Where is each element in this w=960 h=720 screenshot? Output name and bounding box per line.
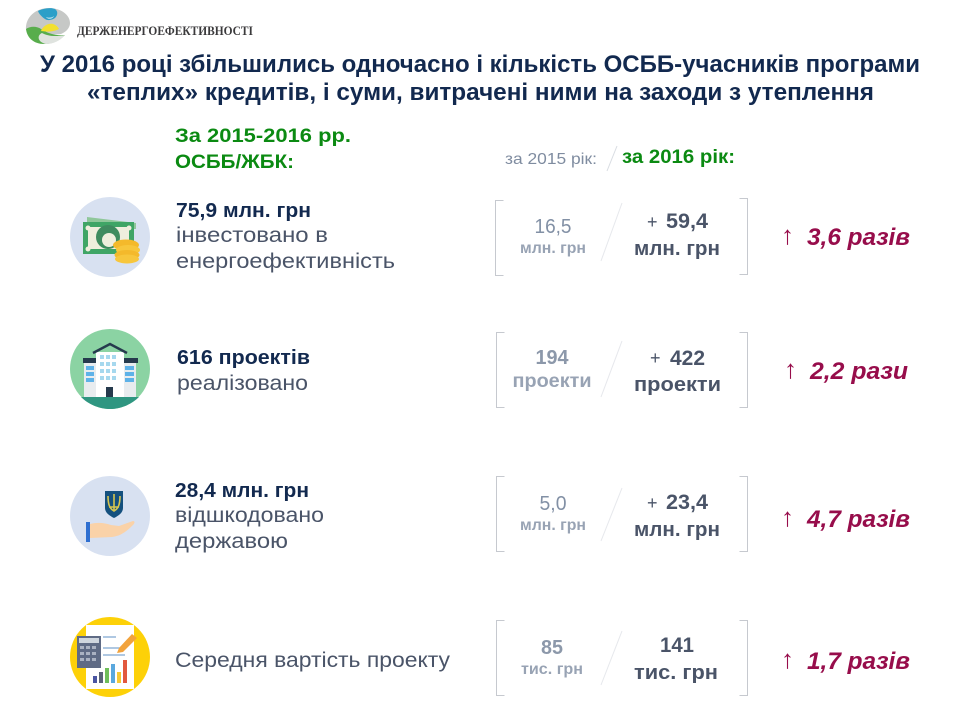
bracket box 2: +	[650, 348, 661, 368]
logo: ДЕРЖЕНЕРГОЕФЕКТИВНОСТІ	[77, 23, 253, 38]
bracket box 2	[496, 332, 748, 408]
icon: calculator and chart	[70, 617, 150, 697]
bracket box 3	[496, 476, 748, 552]
text: invested: 75,9 млн. грн	[176, 199, 311, 222]
growth: 3.6 times: 3,6 разів	[807, 224, 910, 251]
bracket box 2: 422	[670, 347, 705, 370]
bracket box 4: тис. грн	[521, 661, 583, 678]
text: projects	[177, 346, 310, 395]
text: projects: 616 проектів	[177, 346, 310, 369]
icon: money and coins	[70, 197, 150, 277]
text: invested	[176, 199, 395, 273]
bracket box 1: 16,5	[534, 216, 572, 238]
bracket box 3: +	[647, 493, 658, 513]
bracket box 4: тис. грн	[634, 661, 718, 684]
growth: 2.2 times	[784, 355, 908, 385]
bracket box 3: млн. грн	[520, 517, 586, 534]
bracket box 3: млн. грн	[634, 518, 720, 541]
title: «теплих» кредитів, і суми, витрачені ними на заходи з утеплення	[87, 79, 874, 106]
icon: building	[70, 329, 150, 409]
title	[40, 51, 920, 106]
text: reimbursed: відшкодовано	[175, 504, 324, 527]
text: invested: інвестовано в	[176, 224, 328, 247]
text: average project cost: Середня вартість проекту	[175, 649, 451, 672]
text: projects: реалізовано	[177, 372, 308, 395]
text: reimbursed: 28,4 млн. грн	[175, 479, 309, 502]
bracket box 1	[496, 198, 748, 276]
bracket box 1: млн. грн	[520, 240, 586, 257]
text: reimbursed	[175, 479, 324, 553]
logo	[26, 8, 253, 44]
bracket box 2: проекти	[512, 371, 592, 392]
icon: trident and hand	[70, 476, 150, 556]
bracket box 4	[496, 620, 748, 696]
growth: 4.7 times: 4,7 разів	[806, 506, 910, 533]
growth: 4.7 times: ↑	[781, 503, 794, 532]
subheading: period and housing associations	[175, 125, 351, 173]
bracket box 4: 141	[660, 634, 694, 657]
column header: 2015: за 2015 рік:	[505, 151, 597, 168]
growth: 2.2 times: 2,2 рази	[809, 358, 908, 385]
text: invested: енергоефективність	[176, 250, 395, 273]
subheading: period and housing associations: За 2015-2016 рр.	[175, 125, 351, 147]
bracket box 2: проекти	[634, 373, 721, 396]
text: reimbursed: державою	[175, 530, 288, 553]
growth: 2.2 times: ↑	[784, 355, 797, 384]
bracket box 3: 23,4	[666, 491, 708, 514]
subheading: period and housing associations: ОСББ/ЖБК:	[175, 151, 294, 173]
title: У 2016 році збільшились одночасно і кількість ОСББ-учасників програми	[40, 51, 920, 78]
column header: 2016: за 2016 рік:	[622, 147, 735, 168]
bracket box 1: млн. грн	[634, 237, 720, 260]
growth: 1.7 times: 1,7 разів	[807, 648, 910, 675]
bracket box 4: 85	[541, 637, 563, 659]
bracket box 1: +	[647, 212, 658, 232]
growth: 3.6 times: ↑	[781, 221, 794, 250]
growth: 1.7 times: ↑	[781, 645, 794, 674]
bracket box 3: 5,0	[540, 493, 566, 515]
bracket box 2: 194	[536, 347, 569, 369]
bracket box 1: 59,4	[666, 210, 708, 233]
